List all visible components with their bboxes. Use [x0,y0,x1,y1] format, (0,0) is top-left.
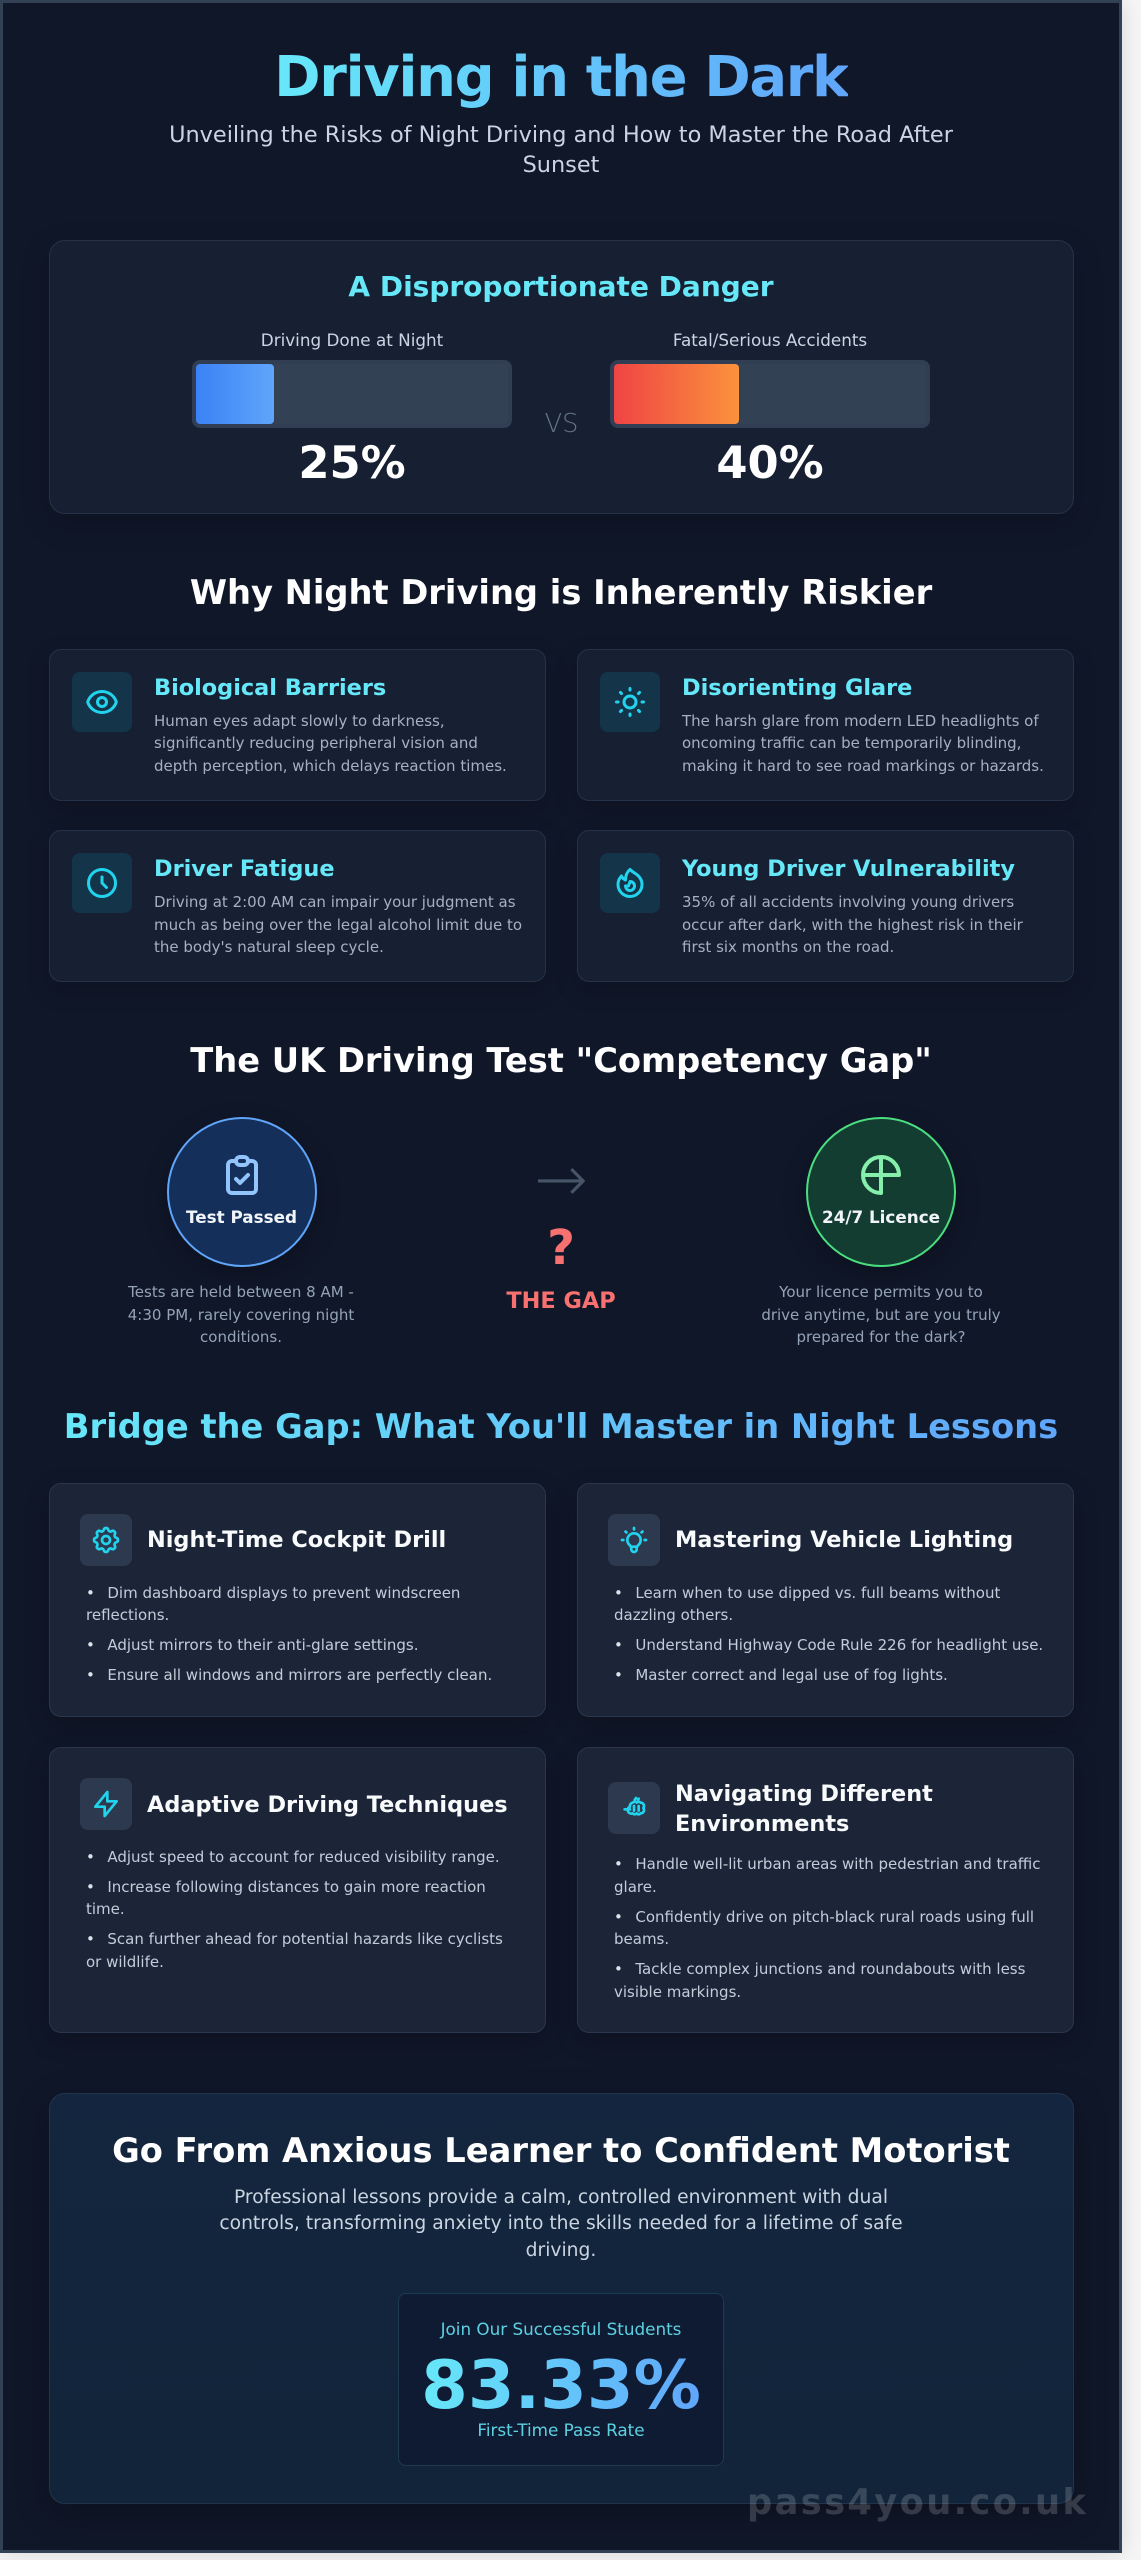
lesson list: or wildlife. [86,1952,164,1970]
lesson heading: Navigating Different [675,1780,933,1806]
subtitle: Unveiling the Risks of Night Driving and How to Master the Road After [169,122,953,148]
lesson list: • Understand Highway Code Rule 226 for headlight use. [614,1636,1043,1654]
cta text: controls, transforming anxiety into the skills needed for a lifetime of safe [219,2213,903,2234]
label: fatal accidents: Fatal/Serious Accidents [673,330,867,350]
icon: fire [600,853,660,913]
icon: light bulb [608,1514,660,1566]
icon: clock [72,853,132,913]
card text: the body's natural sleep cycle. [154,938,384,956]
circle: licence [806,1117,956,1267]
card: young driver vulnerability [577,830,1074,982]
subtitle: Sunset [523,152,599,178]
icon: gear [80,1514,132,1566]
card text: Human eyes adapt slowly to darkness, [154,712,445,730]
lesson list: time. [86,1900,125,1918]
lesson list: • Master correct and legal use of fog lights. [614,1666,948,1684]
label: driving done at night: Driving Done at Night [261,330,443,350]
panel: a disproportionate danger [49,240,1074,514]
lesson list: beams. [614,1930,669,1948]
card text [682,893,1023,956]
lesson card: adaptive techniques [49,1747,546,2033]
arrow: → [534,1142,588,1216]
caption: licence: prepared for the dark? [797,1328,965,1346]
lesson heading: Mastering Vehicle Lighting [675,1527,1013,1553]
pass rate caption: First-Time Pass Rate [477,2420,645,2440]
lesson list: visible markings. [614,1982,741,2000]
icon: lightning [80,1778,132,1830]
card text: oncoming traffic can be temporarily blinding, [682,734,1021,752]
caption: licence: Your licence permits you to [779,1283,983,1301]
caption: test passed: Tests are held between 8 AM - [128,1283,354,1301]
heading: bridge the gap: Bridge the Gap: What You'll Master in Night Lessons [64,1407,1058,1446]
panel: call to action [49,2093,1074,2504]
card: disorienting glare [577,649,1074,801]
circle: test passed [166,1117,316,1267]
lesson list: • Dim dashboard displays to prevent windscreen [86,1584,460,1602]
lesson list: dazzling others. [614,1606,733,1624]
question mark: ? [547,1220,575,1276]
heading: competency gap: The UK Driving Test "Competency Gap" [190,1040,932,1080]
cta text: driving. [526,2240,596,2261]
lesson list: • Adjust mirrors to their anti-glare settings. [86,1636,418,1654]
card heading: Young Driver Vulnerability [682,856,1015,882]
stat: 40%: 40% [716,436,824,488]
lesson list [86,1848,503,1970]
lesson heading: Adaptive Driving Techniques [147,1792,508,1818]
heading: why riskier: Why Night Driving is Inherently Riskier [190,572,932,612]
card: driver fatigue [49,830,546,982]
caption: licence [761,1283,1001,1346]
icon: clipboard check [226,1155,258,1195]
icon: navigation [608,1782,660,1834]
card text: occur after dark, with the highest risk in their [682,916,1023,934]
vs label: VS [545,408,578,438]
pass rate label: Join Our Successful Students [441,2319,681,2339]
card text: making it hard to see road markings or hazards. [682,757,1044,775]
lesson list: • Learn when to use dipped vs. full beams without [614,1584,1000,1602]
card text [154,712,507,775]
lesson card: different environments [577,1747,1074,2033]
card text: 35% of all accidents involving young drivers [682,893,1014,911]
lesson card: vehicle lighting [577,1483,1074,1717]
card heading: Biological Barriers [154,675,386,701]
icon: eye [72,672,132,732]
card text: much as being over the legal alcohol limit due to [154,916,522,934]
icon: sun [600,672,660,732]
card heading: Disorienting Glare [682,675,912,701]
lesson card: cockpit drill [49,1483,546,1717]
title: Driving in the Dark [274,45,848,110]
card text: The harsh glare from modern LED headlights of [682,712,1039,730]
cta heading: Go From Anxious Learner to Confident Motorist [112,2130,1010,2170]
lesson list: • Ensure all windows and mirrors are perfectly clean. [86,1666,492,1684]
lesson list: • Confidently drive on pitch-black rural roads using full [614,1908,1034,1926]
lesson heading: Environments [675,1810,849,1836]
lesson heading [675,1780,933,1836]
caption: licence: drive anytime, but are you truly [761,1306,1001,1324]
watermark: pass4you.co.uk [747,2482,1088,2522]
panel heading: danger: A Disproportionate Danger [348,270,774,303]
card: biological barriers [49,649,546,801]
lesson list: glare. [614,1878,657,1896]
bar: 40 percent [610,360,930,428]
lesson list [614,1855,1041,2000]
caption: test passed: conditions. [200,1328,282,1346]
card text: depth perception, which delays reaction times. [154,757,507,775]
caption: test passed: 4:30 PM, rarely covering night [128,1306,354,1324]
the gap label: THE GAP [506,1288,616,1314]
card text [154,893,522,956]
circle label: Test Passed [186,1207,297,1227]
lesson list: • Adjust speed to account for reduced visibility range. [86,1848,500,1866]
lesson list: • Scan further ahead for potential hazards like cyclists [86,1930,503,1948]
lesson list: • Handle well-lit urban areas with pedestrian and traffic [614,1855,1041,1873]
cta text [219,2187,903,2261]
pass rate number: 83.33% [421,2346,701,2424]
lesson list [614,1584,1043,1684]
card text: Driving at 2:00 AM can impair your judgment as [154,893,516,911]
card text: first six months on the road. [682,938,894,956]
bar: 25 percent [192,360,512,428]
lesson list: • Tackle complex junctions and roundabouts with less [614,1960,1025,1978]
lesson heading: Night-Time Cockpit Drill [147,1527,446,1553]
icon: licence globe [861,1155,901,1195]
lesson list [86,1584,492,1684]
pass rate box [398,2293,724,2466]
card text [682,712,1044,775]
stat: 25%: 25% [298,436,406,488]
cta text: Professional lessons provide a calm, controlled environment with dual [234,2187,888,2208]
card heading: Driver Fatigue [154,856,335,882]
card text: significantly reducing peripheral vision and [154,734,478,752]
circle label: 24/7 Licence [822,1207,940,1227]
lesson list: reflections. [86,1606,169,1624]
caption: test passed [128,1283,354,1346]
subtitle [169,122,953,178]
lesson list: • Increase following distances to gain more reaction [86,1878,486,1896]
